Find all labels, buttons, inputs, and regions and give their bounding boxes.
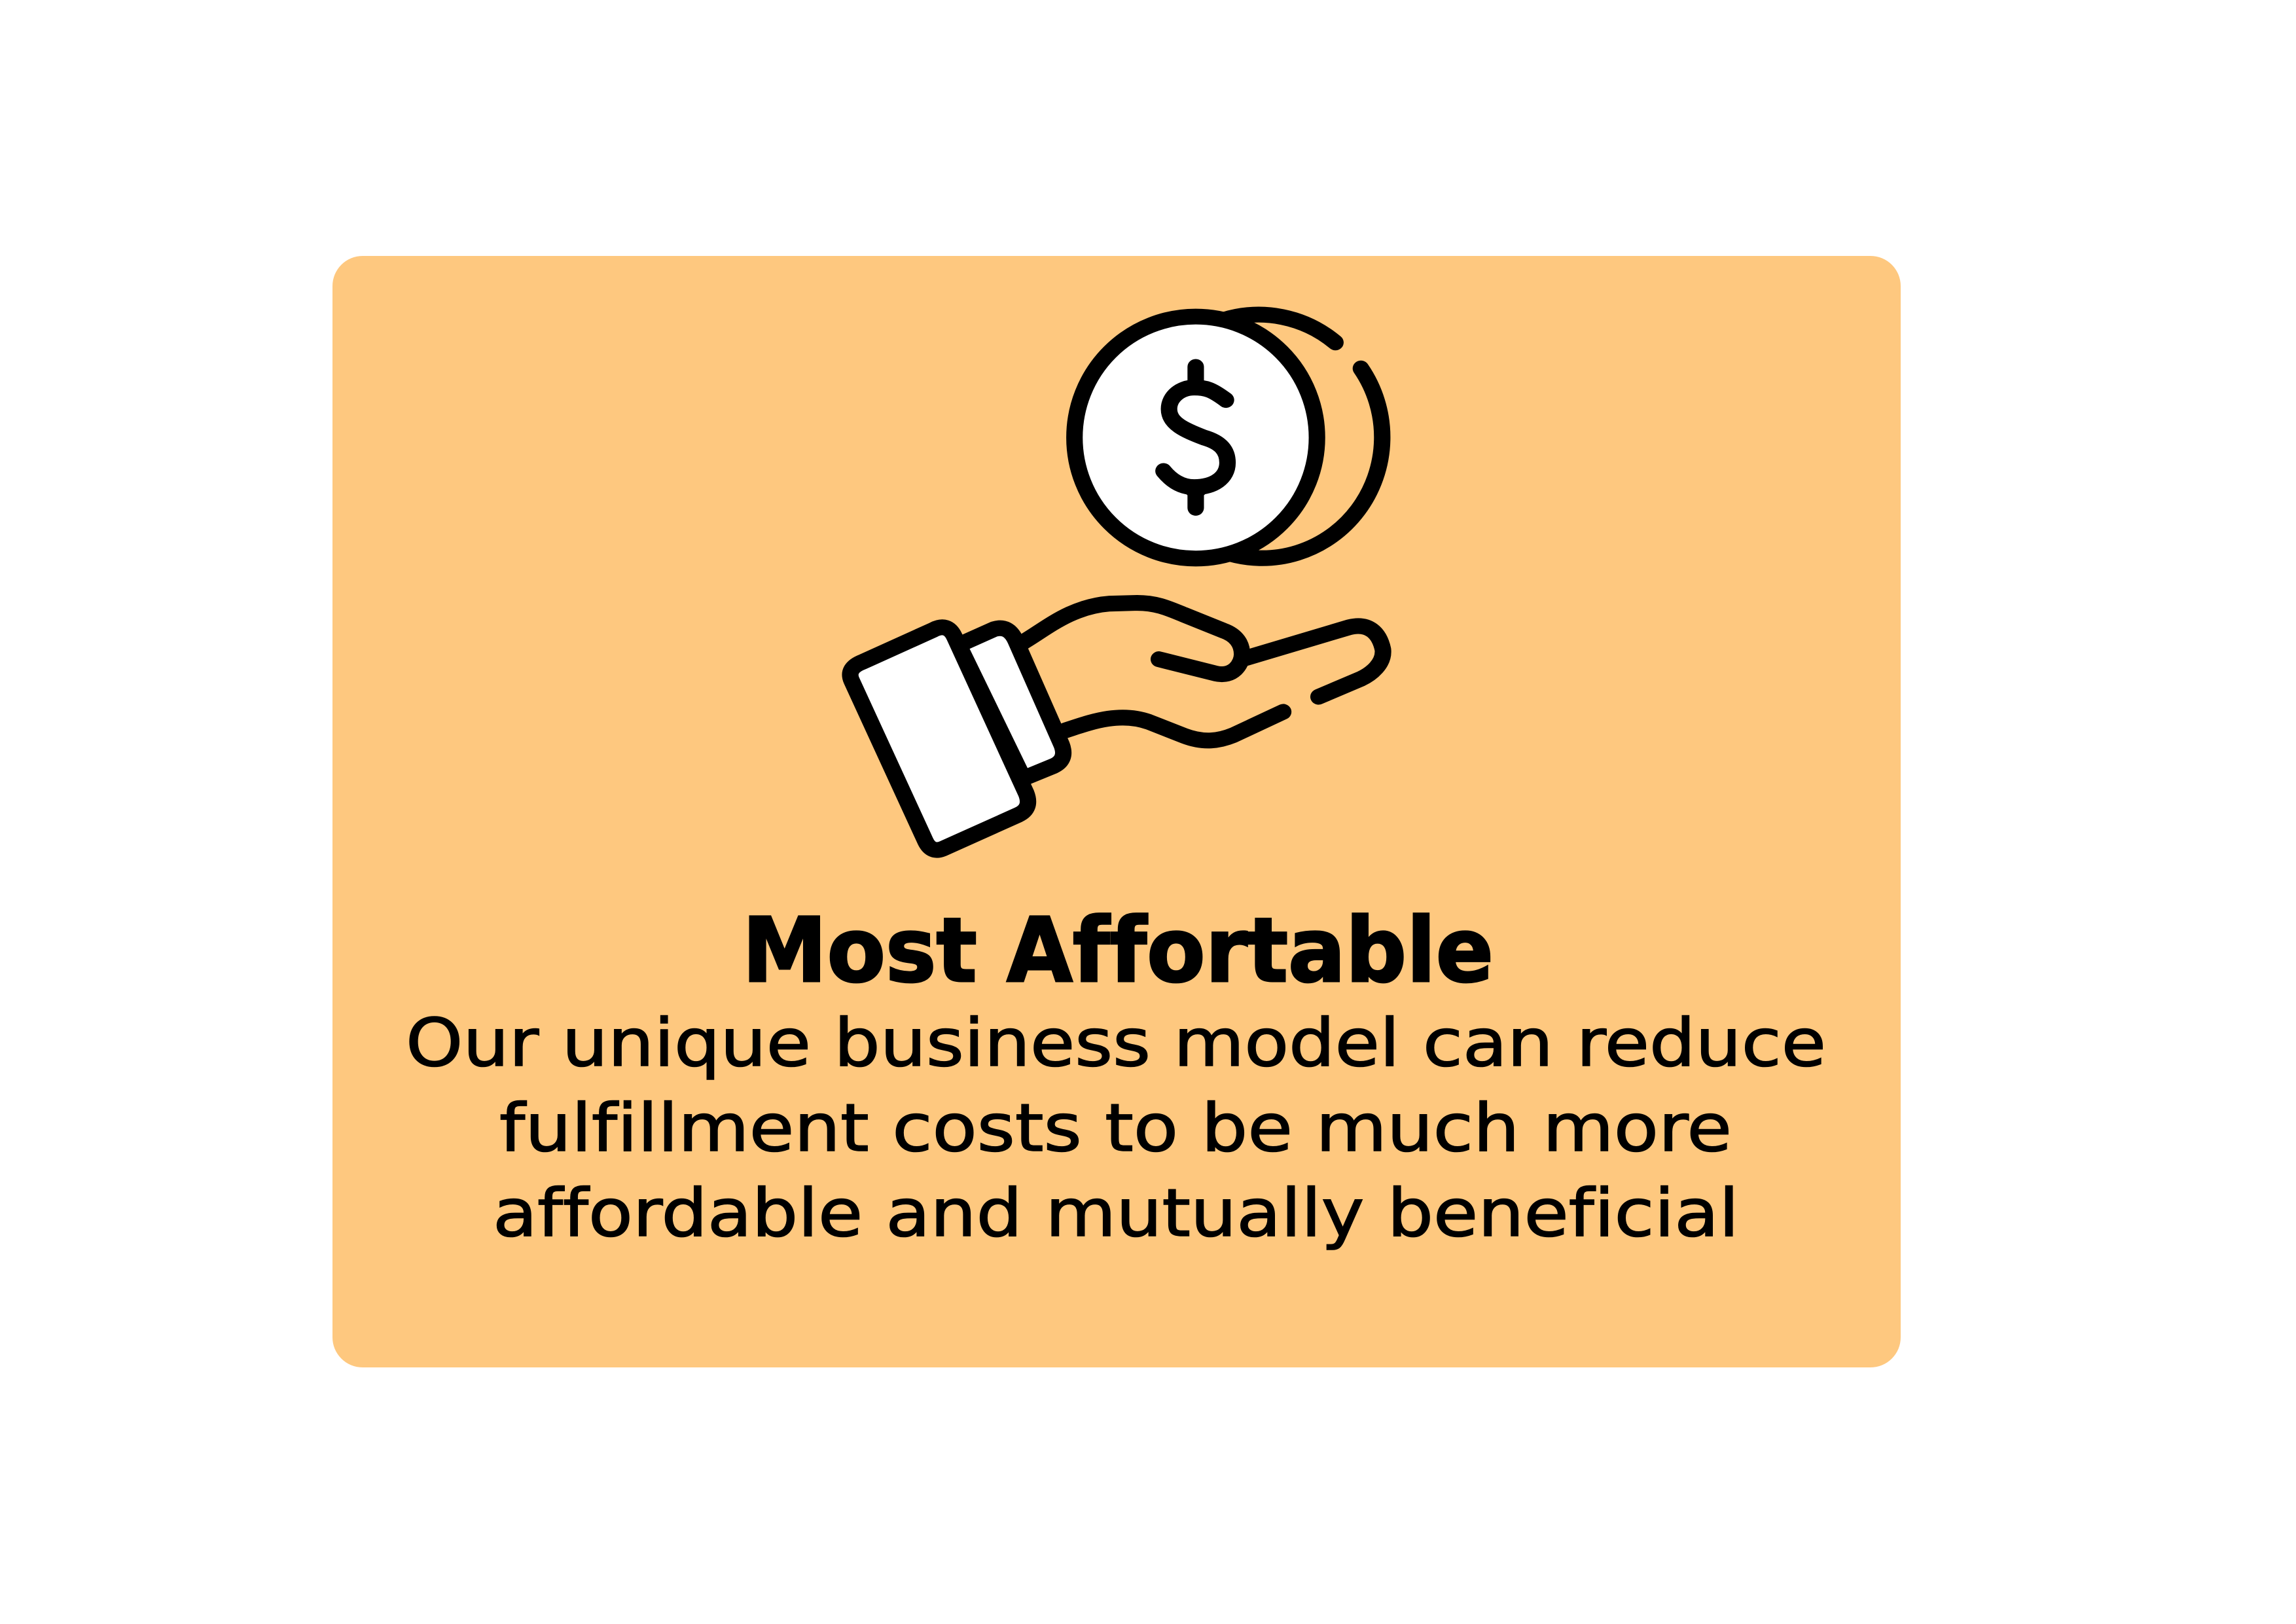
icon: hand receiving coin: [850, 315, 1383, 850]
text line 1: Our unique business model can reduce: [406, 1004, 1826, 1081]
text block: description: [406, 1004, 1826, 1252]
panel: orange card: [332, 256, 1901, 1367]
icon: back coin: [1223, 315, 1382, 558]
icon: front coin: [1075, 317, 1317, 558]
icon: inner cuff: [959, 628, 1064, 778]
text line 2: fulfillment costs to be much more: [499, 1089, 1732, 1166]
icon: outer cuff: [850, 627, 1028, 850]
text line 3: affordable and mutually beneficial: [493, 1174, 1739, 1252]
icon: hand outline: [1024, 603, 1383, 740]
title: Most Affortable: [742, 899, 1494, 1003]
icon: dollar sign: [1164, 367, 1227, 508]
